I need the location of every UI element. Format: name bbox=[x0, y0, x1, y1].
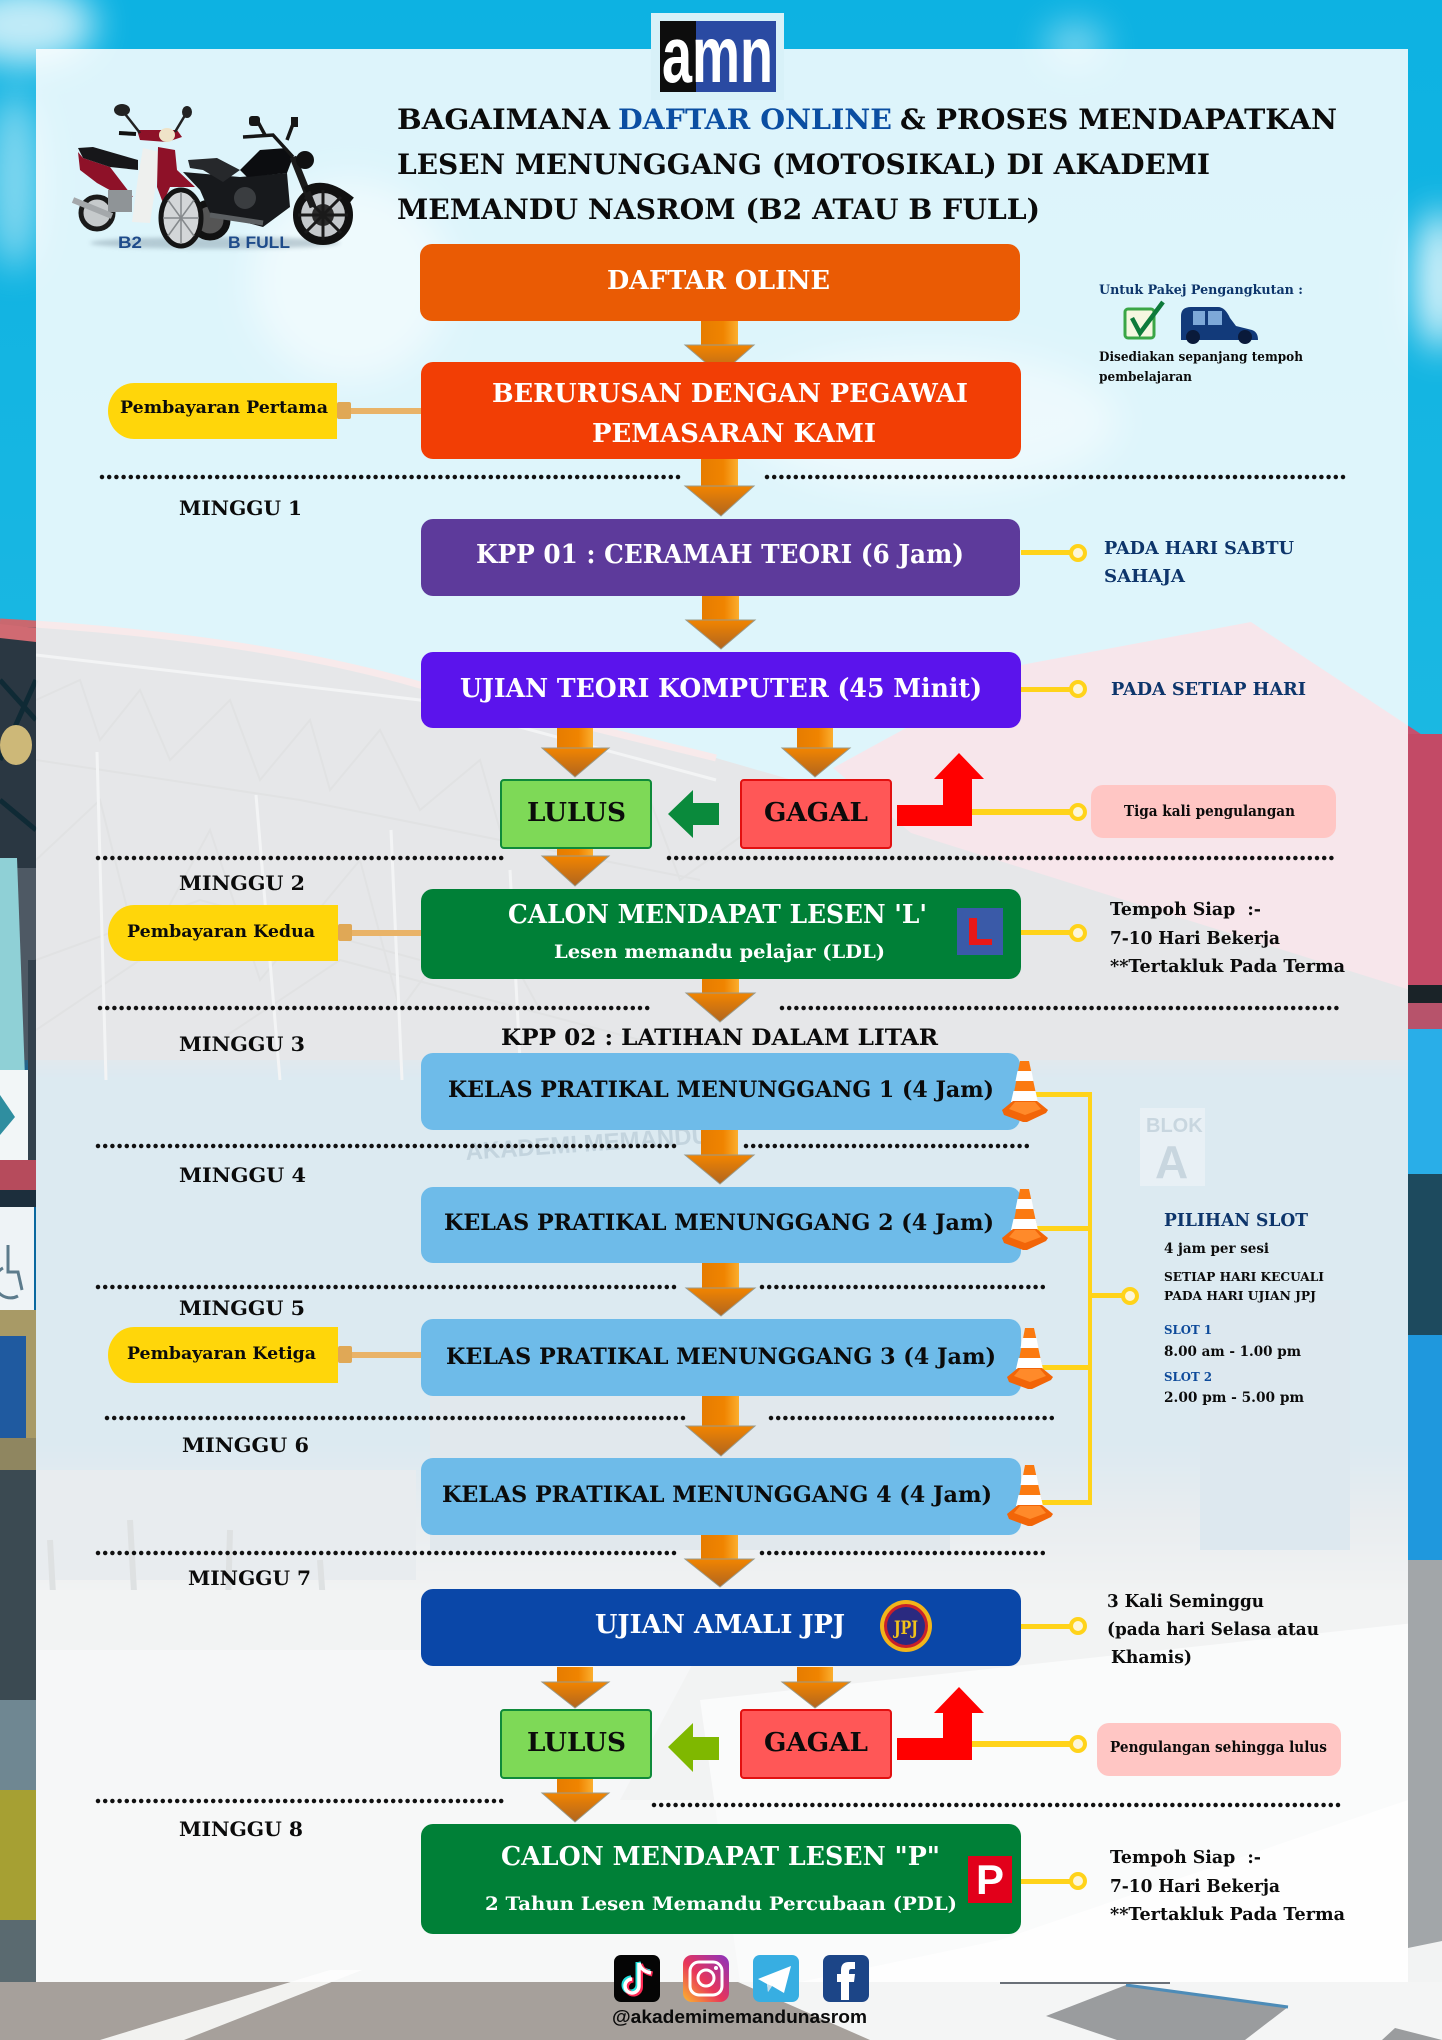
step: kelas pratikal 3: KELAS PRATIKAL MENUNGGANG 3 (4 Jam) bbox=[446, 1344, 996, 1370]
note: pilihan slot: SETIAP HARI KECUALI bbox=[1164, 1269, 1324, 1284]
icon: traffic cone 2 bbox=[1002, 1189, 1048, 1250]
step: berurusan dengan pegawai bbox=[421, 362, 1021, 459]
connector and note: pada hari sabtu sahaja: SAHAJA bbox=[1104, 566, 1186, 587]
step: calon mendapat lesen P: 2 Tahun Lesen Memandu Percubaan (PDL) bbox=[485, 1893, 957, 1915]
connector and note: pada hari sabtu sahaja: PADA HARI SABTU bbox=[1104, 538, 1294, 559]
title: DAFTAR ONLINE bbox=[618, 103, 892, 136]
faded sign text in the photo bbox=[465, 1115, 1203, 1188]
label: minggu 7: MINGGU 7 bbox=[188, 1566, 311, 1590]
arrow: retry up bbox=[897, 753, 984, 826]
arrow: kelas 2 to kelas 3 bbox=[686, 1263, 755, 1316]
title: MEMANDU NASROM (B2 ATAU B FULL) bbox=[397, 193, 1040, 226]
arrow: berurusan to kpp 01 bbox=[685, 459, 754, 516]
slot connector bracket bbox=[1030, 1092, 1137, 1505]
arrow: kelas 4 to ujian amali bbox=[685, 1535, 754, 1587]
label: minggu 2: MINGGU 2 bbox=[179, 871, 305, 895]
note: pilihan slot: SLOT 2 bbox=[1164, 1370, 1212, 1384]
connector and note: tempoh siap L bbox=[1021, 899, 1345, 977]
step: daftar online bbox=[420, 244, 1020, 321]
faded sign text in the photo: A bbox=[1155, 1136, 1188, 1188]
icon: P plate: P bbox=[976, 1856, 1004, 1903]
connector and note: tempoh siap L: **Tertakluk Pada Terma bbox=[1110, 956, 1345, 977]
arrow: lesen L to kelas 1 bbox=[686, 979, 755, 1022]
step: calon mendapat lesen P bbox=[421, 1824, 1021, 1934]
note: pakej pengangkutan: Disediakan sepanjang tempoh bbox=[1099, 350, 1304, 365]
icon: jpj logo bbox=[880, 1600, 932, 1652]
title: LESEN MENUNGGANG (MOTOSIKAL) DI AKADEMI bbox=[397, 148, 1210, 181]
arrow: lulus to lesen P bbox=[542, 1779, 609, 1822]
step: kelas pratikal 3 bbox=[421, 1319, 1021, 1396]
connector and note: 3 kali seminggu: Khamis) bbox=[1111, 1647, 1192, 1668]
note: pilihan slot bbox=[1164, 1210, 1324, 1406]
callout: pembayaran ketiga: Pembayaran Ketiga bbox=[127, 1344, 316, 1364]
note: pilihan slot: 4 jam per sesi bbox=[1164, 1241, 1269, 1257]
illustration: motorcycles bbox=[73, 104, 352, 252]
arrow: lulus to lesen L bbox=[542, 849, 609, 886]
icon: telegram bbox=[753, 1955, 799, 2002]
step: ujian amali jpj bbox=[421, 1589, 1021, 1666]
heading: kpp 02 latihan dalam litar: KPP 02 : LATIHAN DALAM LITAR bbox=[501, 1025, 939, 1051]
icon: car bbox=[1181, 307, 1258, 344]
connector and note: tempoh siap P: **Tertakluk Pada Terma bbox=[1110, 1904, 1345, 1925]
label: minggu 8: MINGGU 8 bbox=[179, 1817, 303, 1841]
result: gagal 2 bbox=[741, 1710, 891, 1778]
callout: pembayaran kedua: Pembayaran Kedua bbox=[127, 922, 315, 942]
note: pilihan slot: 2.00 pm - 5.00 pm bbox=[1164, 1390, 1304, 1406]
arrow: ujian amali to gagal bbox=[782, 1667, 850, 1708]
icon: P plate bbox=[968, 1856, 1012, 1903]
arrow: daftar to berurusan bbox=[685, 321, 754, 375]
step: berurusan dengan pegawai: BERURUSAN DENGAN PEGAWAI bbox=[492, 379, 968, 409]
icon: instagram bbox=[683, 1955, 729, 2002]
step: kelas pratikal 4: KELAS PRATIKAL MENUNGGANG 4 (4 Jam) bbox=[442, 1482, 992, 1508]
result: lulus: LULUS bbox=[527, 798, 626, 828]
icon: jpj logo: JPJ bbox=[893, 1617, 918, 1639]
callout: pembayaran pertama: Pembayaran Pertama bbox=[120, 398, 328, 418]
callout: pembayaran pertama bbox=[108, 383, 421, 439]
step: calon mendapat lesen L: CALON MENDAPAT LESEN 'L' bbox=[508, 900, 927, 930]
step: kpp 01 ceramah teori bbox=[421, 519, 1020, 596]
step: ujian teori komputer bbox=[421, 652, 1021, 728]
connector and note: pengulangan sehingga lulus: Pengulangan sehingga lulus bbox=[1110, 1738, 1327, 1756]
note: pilihan slot: SLOT 1 bbox=[1164, 1323, 1212, 1337]
callout: pembayaran ketiga bbox=[108, 1327, 421, 1383]
title: BAGAIMANA bbox=[397, 103, 611, 136]
label: minggu 3: MINGGU 3 bbox=[179, 1032, 305, 1056]
connector and note: 3 kali seminggu bbox=[1021, 1591, 1319, 1668]
note: pilihan slot: PADA HARI UJIAN JPJ bbox=[1164, 1288, 1316, 1303]
step: daftar online: DAFTAR OLINE bbox=[607, 266, 830, 296]
note: pilihan slot: PILIHAN SLOT bbox=[1164, 1210, 1309, 1231]
step: kelas pratikal 1: KELAS PRATIKAL MENUNGGANG 1 (4 Jam) bbox=[448, 1077, 994, 1103]
connector and note: pada setiap hari bbox=[1021, 679, 1306, 700]
connector and note: tempoh siap P bbox=[1021, 1847, 1345, 1925]
icon: traffic cone 4 bbox=[1007, 1465, 1053, 1526]
result: lulus bbox=[501, 780, 651, 848]
arrow: gagal to lulus 2 bbox=[668, 1723, 719, 1772]
label: minggu 4: MINGGU 4 bbox=[179, 1163, 306, 1187]
connector and note: pengulangan sehingga lulus bbox=[972, 1723, 1341, 1776]
faded sign text in the photo: BLOK bbox=[1146, 1115, 1203, 1137]
icon: L plate bbox=[957, 908, 1003, 955]
connector and note: tempoh siap L: 7-10 Hari Bekerja bbox=[1110, 928, 1280, 949]
icon: check mark bbox=[1125, 302, 1163, 338]
connector and note: 3 kali seminggu: 3 Kali Seminggu bbox=[1107, 1591, 1264, 1612]
note: pilihan slot: 8.00 am - 1.00 pm bbox=[1164, 1344, 1301, 1360]
result: gagal 2: GAGAL bbox=[764, 1728, 868, 1758]
step: calon mendapat lesen P: CALON MENDAPAT LESEN "P" bbox=[501, 1842, 940, 1872]
bike: B full bbox=[183, 116, 352, 241]
step: ujian amali jpj: UJIAN AMALI JPJ bbox=[595, 1610, 845, 1640]
icon: traffic cone 1 bbox=[1002, 1061, 1048, 1122]
title bbox=[397, 103, 1337, 226]
faded sign text in the photo: AKADEMI MEMANDU bbox=[465, 1122, 710, 1166]
label: minggu 6: MINGGU 6 bbox=[182, 1433, 309, 1457]
bike: B2 bbox=[73, 104, 201, 246]
connector and note: tempoh siap L: Tempoh Siap :- bbox=[1110, 899, 1261, 920]
logo bbox=[651, 10, 784, 100]
arrow: kelas 1 to kelas 2 bbox=[685, 1130, 754, 1184]
result: gagal bbox=[741, 780, 891, 848]
step: kelas pratikal 2: KELAS PRATIKAL MENUNGGANG 2 (4 Jam) bbox=[444, 1210, 994, 1236]
step: calon mendapat lesen L bbox=[421, 889, 1021, 979]
icon: tiktok bbox=[614, 1955, 660, 2002]
icon: facebook bbox=[823, 1955, 869, 2002]
arrow: kpp 01 to ujian teori bbox=[686, 596, 755, 649]
social handle: @akademimemandunasrom bbox=[612, 2007, 867, 2027]
note: pakej pengangkutan bbox=[1099, 283, 1304, 385]
arrow: ujian to gagal bbox=[782, 728, 850, 777]
connector and note: 3 kali seminggu: (pada hari Selasa atau bbox=[1107, 1619, 1319, 1640]
arrow: ujian amali to lulus bbox=[542, 1667, 609, 1708]
step: kelas pratikal 4 bbox=[421, 1458, 1021, 1535]
connector and note: tiga kali pengulangan: Tiga kali pengulangan bbox=[1124, 802, 1295, 820]
connector and note: pada hari sabtu sahaja bbox=[1021, 538, 1294, 587]
icon: traffic cone 3 bbox=[1007, 1328, 1053, 1389]
connector and note: tiga kali pengulangan bbox=[972, 785, 1336, 838]
step: kpp 01 ceramah teori: KPP 01 : CERAMAH TEORI (6 Jam) bbox=[476, 540, 964, 570]
arrow: retry up 2 bbox=[897, 1687, 984, 1760]
note: pakej pengangkutan: pembelajaran bbox=[1099, 370, 1192, 385]
label: minggu 1: MINGGU 1 bbox=[179, 496, 302, 520]
result: lulus 2: LULUS bbox=[527, 1728, 626, 1758]
step: ujian teori komputer: UJIAN TEORI KOMPUTER (45 Minit) bbox=[460, 674, 982, 704]
note: pakej pengangkutan: Untuk Pakej Pengangkutan : bbox=[1099, 283, 1303, 298]
title: & PROSES MENDAPATKAN bbox=[900, 103, 1337, 136]
step: kelas pratikal 2 bbox=[421, 1187, 1021, 1263]
callout: pembayaran kedua bbox=[108, 905, 421, 961]
label: minggu 5: MINGGU 5 bbox=[179, 1296, 305, 1320]
connector and note: pada setiap hari: PADA SETIAP HARI bbox=[1111, 679, 1306, 700]
result: lulus 2 bbox=[501, 1710, 651, 1778]
connector and note: tempoh siap P: 7-10 Hari Bekerja bbox=[1110, 1876, 1280, 1897]
step: kelas pratikal 1 bbox=[421, 1053, 1020, 1130]
connector and note: tempoh siap P: Tempoh Siap :- bbox=[1110, 1847, 1261, 1868]
result: gagal: GAGAL bbox=[764, 798, 868, 828]
arrow: ujian to lulus bbox=[542, 728, 609, 777]
step: calon mendapat lesen L: Lesen memandu pelajar (LDL) bbox=[554, 941, 885, 963]
arrow: gagal to lulus bbox=[668, 790, 719, 838]
illustration: motorcycles: B FULL bbox=[228, 233, 290, 252]
step: berurusan dengan pegawai: PEMASARAN KAMI bbox=[592, 419, 876, 449]
arrow: kelas 3 to kelas 4 bbox=[686, 1396, 755, 1456]
dotted week dividers bbox=[98, 477, 1343, 1805]
logo: amn bbox=[662, 10, 773, 99]
labels B2 and B FULL: B2 bbox=[118, 233, 142, 252]
